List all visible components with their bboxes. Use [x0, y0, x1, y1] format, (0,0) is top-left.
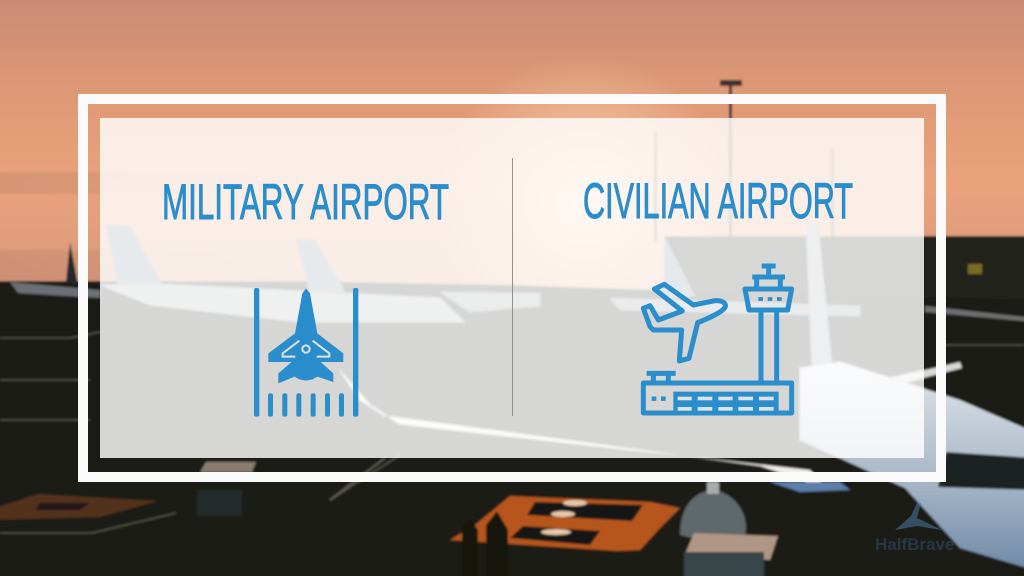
- jet wing details: [283, 341, 329, 357]
- engine and ground vehicle: [680, 482, 778, 576]
- orange-lit ground markings: [0, 494, 680, 551]
- icon: control tower, terminal and departing plane: [643, 266, 792, 413]
- runway edges: [254, 288, 358, 417]
- cockpit window: [938, 452, 1024, 490]
- jet silhouette: [268, 288, 343, 383]
- heading: military airport: MILITARY AIRPORT: [162, 174, 449, 230]
- centre divider: [512, 158, 513, 416]
- baggage equipment: [197, 458, 385, 516]
- terminal building on the right: [664, 234, 1024, 302]
- light poles: [654, 80, 834, 245]
- apron ground: [0, 281, 1024, 576]
- control tower: [745, 266, 792, 382]
- watermark logo: HalfBrave: [875, 535, 954, 554]
- translucent white panel: [100, 118, 924, 458]
- terminal windows: [673, 392, 779, 413]
- large foreground plane: [338, 222, 1024, 570]
- heading: civilian airport: CIVILIAN AIRPORT: [583, 173, 853, 229]
- white outer frame: [83, 99, 941, 477]
- departing plane: [643, 284, 725, 361]
- icon: fighter jet on runway: [254, 288, 358, 417]
- people silhouettes: [462, 511, 508, 576]
- apron lines: [0, 332, 1024, 533]
- planes in the distance: [10, 224, 860, 322]
- sky: [0, 0, 1024, 300]
- terminal building: [643, 373, 792, 413]
- cloud haze bands: [0, 172, 100, 194]
- watermark logo: [875, 503, 954, 554]
